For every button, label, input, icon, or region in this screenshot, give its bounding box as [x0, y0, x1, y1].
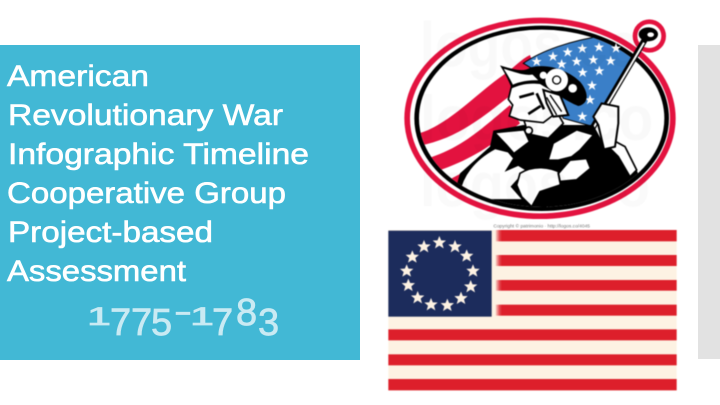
date range: 1: [190, 303, 214, 331]
flag with stars and stripes: [420, 36, 632, 184]
flag field: [388, 230, 677, 391]
coat, black base: [454, 125, 643, 213]
canton: [388, 231, 492, 317]
watermark: [420, 11, 653, 221]
soldier figure: [454, 65, 643, 213]
logo badge rings: [404, 18, 676, 219]
panel: title panel: [0, 45, 360, 360]
face: [506, 84, 553, 124]
tricorn hat: [500, 65, 587, 106]
left sleeve: [459, 148, 527, 200]
right sleeve cuff: [610, 140, 637, 177]
coat chest lapel right: [548, 130, 593, 160]
title text: Cooperative Group: [7, 177, 286, 210]
copyright line: Copyright © patrimonio · http://logos.co/4045: [493, 222, 590, 228]
left coat lapel and shoulder: [495, 130, 529, 153]
red stripes: [388, 230, 677, 390]
title text: Project-based: [8, 216, 213, 249]
title text: American: [7, 60, 149, 93]
date range: -: [174, 295, 192, 328]
watermark: logos.co: [420, 11, 640, 81]
date range: 7: [131, 302, 152, 344]
title text: Revolutionary War: [8, 99, 283, 132]
flag pole and finial: [545, 27, 658, 208]
upper hand and forearm: [593, 103, 618, 149]
watermark: logos.co: [420, 84, 653, 154]
icon: Betsy Ross flag: [388, 229, 678, 392]
forearm across chest: [517, 168, 562, 207]
date range: 1: [87, 303, 111, 331]
heading: title and dates: [6, 60, 309, 344]
hat flower: [545, 69, 568, 91]
date range: 3: [258, 302, 279, 344]
icon: minuteman soldier logo: [404, 11, 676, 229]
circle of thirteen stars: [400, 236, 480, 311]
neck and cravat: [522, 116, 565, 138]
date range: 5: [151, 302, 172, 344]
title text: Infographic Timeline: [8, 138, 309, 171]
watermark: logos.co: [420, 151, 650, 221]
date range: 8: [236, 292, 257, 334]
date range: 7: [212, 302, 233, 344]
stars on waving flag: [532, 42, 621, 121]
date range: [87, 292, 279, 344]
title text: [7, 60, 309, 288]
lower hand: [558, 158, 591, 182]
date range: 7: [110, 302, 131, 344]
hair: [543, 90, 568, 117]
title text: Assessment: [7, 255, 187, 288]
panel: grey side bar: [698, 45, 720, 359]
